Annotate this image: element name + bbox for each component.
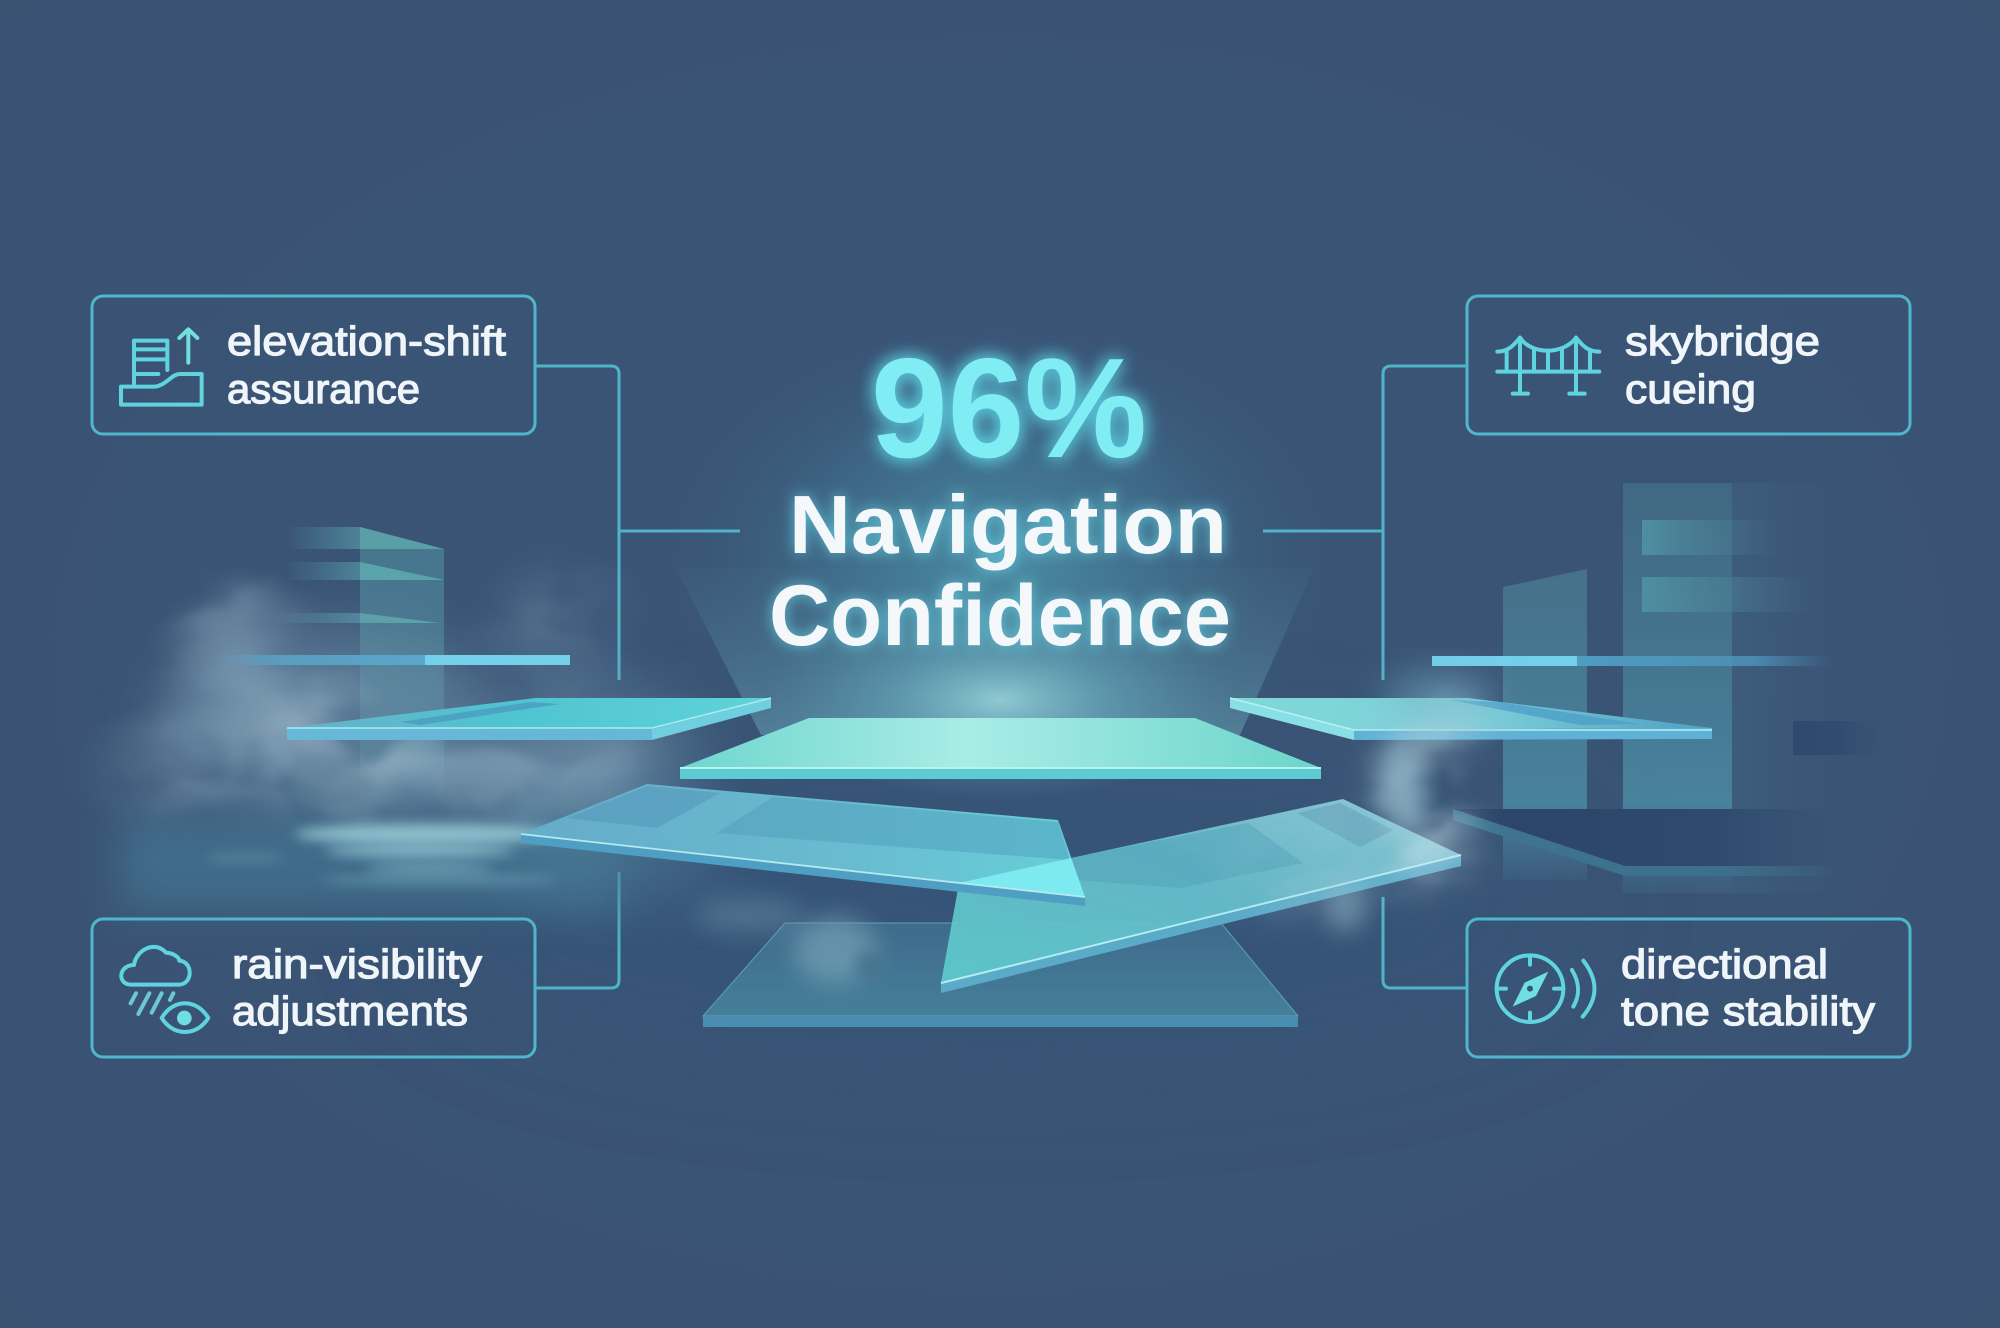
central glowing platform xyxy=(680,718,1321,779)
label text: skybridge xyxy=(1625,318,1820,364)
label text xyxy=(227,318,507,412)
right fog wisps xyxy=(1240,710,1472,905)
lower right angled platform xyxy=(941,799,1461,993)
headline: Navigation Confidence: Navigation xyxy=(789,478,1227,571)
left soft haze and water xyxy=(120,630,720,910)
dark fog hump xyxy=(293,768,377,812)
icon: suspension bridge xyxy=(1497,338,1599,394)
left fog wisps xyxy=(110,570,640,820)
icon: building on rising ground with arrow xyxy=(121,329,202,405)
label text: cueing xyxy=(1625,366,1756,412)
label text xyxy=(232,941,483,1034)
right buildings xyxy=(1503,483,1878,893)
upper left platform xyxy=(287,698,771,740)
thin upper right platform xyxy=(1432,656,1832,666)
panel: skybridge cueing xyxy=(1467,296,1910,434)
label text: elevation-shift xyxy=(227,318,507,364)
headline: 96%: 96% xyxy=(871,329,1147,488)
headline: Navigation Confidence: Confidence xyxy=(769,568,1231,664)
right fog streaks and platform glow xyxy=(1323,674,1495,931)
panel: elevation-shift assurance xyxy=(92,296,535,434)
connector lines xyxy=(535,366,1467,988)
panel: directional tone stability xyxy=(1467,919,1910,1057)
label text: rain-visibility xyxy=(232,941,483,987)
centre fog over bottom platform xyxy=(695,897,881,984)
light beam xyxy=(676,568,1314,800)
label text: tone stability xyxy=(1621,988,1876,1034)
icon: cloud with rain and eye xyxy=(121,947,208,1032)
bottom translucent platform xyxy=(703,923,1298,1027)
label text: directional xyxy=(1621,941,1828,987)
panel: rain-visibility adjustments xyxy=(92,919,535,1057)
label text xyxy=(1621,941,1876,1034)
lower left angled platform xyxy=(521,784,1085,906)
label text xyxy=(1625,318,1820,412)
icon: compass with sound waves xyxy=(1497,955,1594,1022)
thin upper left platform xyxy=(215,655,570,665)
headline: Navigation Confidence xyxy=(769,478,1231,664)
label text: adjustments xyxy=(232,988,468,1034)
label text: assurance xyxy=(227,366,420,412)
dark right platform xyxy=(1453,809,1840,876)
upper right platform xyxy=(1230,698,1712,740)
left building xyxy=(270,527,444,810)
